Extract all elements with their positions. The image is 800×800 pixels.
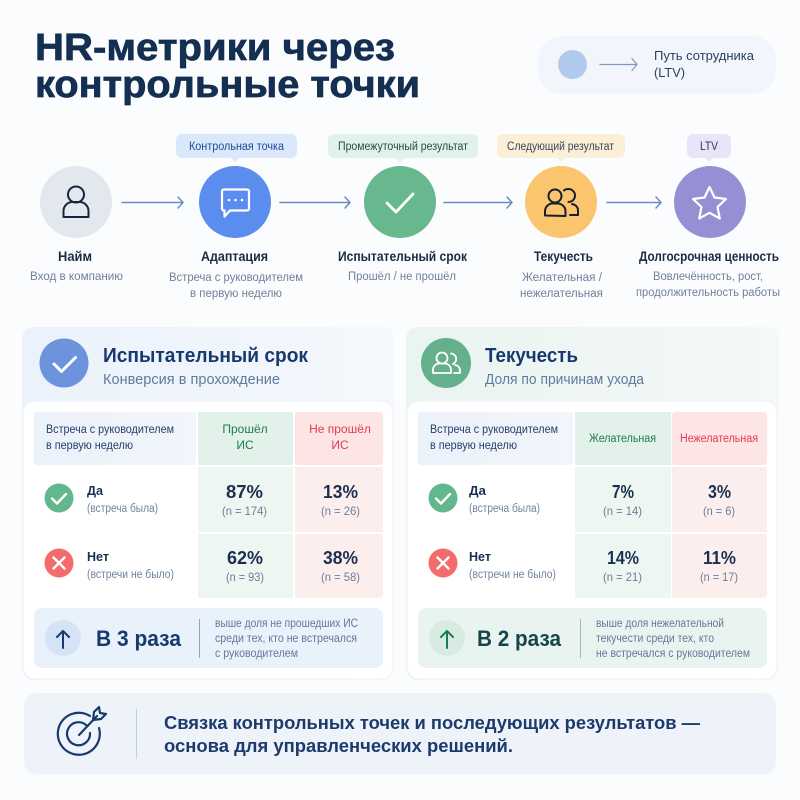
step: Найм — [30, 166, 123, 283]
timeline arrows — [122, 197, 661, 208]
table: Нежелательная — [680, 433, 758, 445]
icon: target — [58, 707, 106, 755]
legend pill: Путь сотрудника — [654, 48, 755, 63]
legend pill: (LTV) — [654, 65, 685, 80]
row: Нет: Нет — [87, 549, 109, 564]
row: Нет: (n = 17) — [700, 570, 738, 584]
table: Прошёл — [222, 422, 268, 436]
row: Нет: (встречи не было) — [87, 569, 174, 581]
step: Найм: Найм — [58, 249, 92, 264]
step: Долгосрочная ценность: Долгосрочная ценность — [639, 249, 779, 264]
table: ИС — [236, 438, 254, 452]
legend pill — [538, 36, 776, 94]
table — [34, 412, 383, 598]
row: Нет: 11% — [703, 548, 736, 568]
title — [35, 27, 420, 106]
row: Да: Да — [87, 483, 104, 498]
step: Текучесть — [497, 134, 625, 300]
callout: В 3 раза — [34, 608, 383, 668]
row: Нет: 14% — [607, 548, 639, 568]
row: Да: (встреча была) — [469, 503, 540, 515]
row: Да: 13% — [323, 482, 358, 502]
row: Нет: (n = 21) — [603, 570, 642, 584]
bottom banner: Связка контрольных точек и последующих результатов — — [164, 712, 700, 733]
panel: Текучесть — [406, 327, 779, 680]
callout: В 2 раза — [418, 608, 767, 668]
step: Долгосрочная ценность: продолжительность работы — [636, 287, 780, 299]
callout: В 3 раза: В 3 раза — [96, 626, 181, 651]
title: HR-метрики через — [35, 27, 395, 69]
step: Испытательный срок — [328, 134, 478, 283]
bottom banner — [24, 693, 776, 774]
callout: В 2 раза: текучести среди тех, кто — [596, 633, 714, 645]
step: Адаптация: в первую неделю — [190, 288, 282, 300]
panel header: Конверсия в прохождение — [103, 371, 280, 388]
row: Да: 87% — [226, 482, 263, 502]
callout: В 2 раза: выше доля нежелательной — [596, 618, 724, 630]
step: Долгосрочная ценность — [636, 134, 780, 299]
callout: В 3 раза: с руководителем — [215, 648, 298, 660]
row: Нет: (n = 58) — [321, 570, 360, 584]
panel header — [421, 338, 645, 388]
row: Да: (n = 26) — [321, 504, 360, 518]
step: Текучесть: нежелательная — [520, 288, 603, 300]
row: Да: Да — [469, 483, 487, 498]
callout: В 2 раза: В 2 раза — [477, 626, 561, 651]
row: Нет: 38% — [323, 548, 358, 568]
row: Нет: Нет — [469, 549, 491, 564]
step: Долгосрочная ценность: LTV — [700, 141, 718, 153]
row: Да: (n = 174) — [222, 504, 267, 518]
row: Да: (n = 14) — [603, 504, 642, 518]
table: ИС — [331, 438, 349, 452]
row: Нет: 62% — [227, 548, 263, 568]
table: Желательная — [589, 433, 656, 445]
step: Адаптация: Встреча с руководителем — [169, 272, 303, 284]
row: Да: (n = 6) — [703, 504, 735, 518]
bottom banner: основа для управленческих решений. — [164, 735, 513, 756]
row: Нет — [44, 548, 360, 584]
step: Испытательный срок: Промежуточный результат — [338, 141, 469, 153]
step: Долгосрочная ценность: Вовлечённость, рост, — [653, 271, 763, 283]
table: Не прошёл — [309, 422, 371, 436]
callout: В 3 раза: выше доля не прошедших ИС — [215, 618, 358, 630]
callout: В 3 раза: среди тех, кто не встречался — [215, 633, 357, 645]
panel header: Доля по причинам ухода — [485, 371, 645, 388]
row: Нет: (встречи не было) — [469, 569, 556, 581]
step: Найм: Вход в компанию — [30, 271, 123, 283]
callout: В 2 раза: не встречался с руководителем — [596, 648, 750, 660]
row: Да: (встреча была) — [87, 503, 158, 515]
step: Текучесть: Желательная / — [522, 272, 603, 284]
panel header: Испытательный срок — [103, 344, 309, 367]
table: Встреча с руководителем — [46, 424, 174, 436]
row: Да — [428, 482, 735, 518]
row: Да: 3% — [708, 482, 731, 502]
row: Да — [44, 482, 360, 518]
table: в первую неделю — [46, 440, 133, 452]
row: Нет: (n = 93) — [226, 570, 264, 584]
table: в первую неделю — [430, 440, 517, 452]
row: Да: 7% — [612, 482, 634, 502]
step: Адаптация: Адаптация — [201, 249, 268, 264]
panel: Испытательный срок — [22, 327, 394, 680]
table: Встреча с руководителем — [430, 424, 558, 436]
table — [418, 412, 767, 598]
step: Адаптация — [169, 134, 303, 300]
step: Испытательный срок: Прошёл / не прошёл — [348, 271, 456, 283]
step: Адаптация: Контрольная точка — [189, 141, 285, 153]
step: Текучесть: Текучесть — [534, 249, 593, 264]
step: Текучесть: Следующий результат — [507, 141, 615, 153]
row: Нет — [428, 548, 738, 584]
panel header — [40, 338, 309, 388]
step: Испытательный срок: Испытательный срок — [338, 249, 467, 264]
panel header: Текучесть — [485, 344, 578, 367]
title: контрольные точки — [35, 64, 420, 106]
